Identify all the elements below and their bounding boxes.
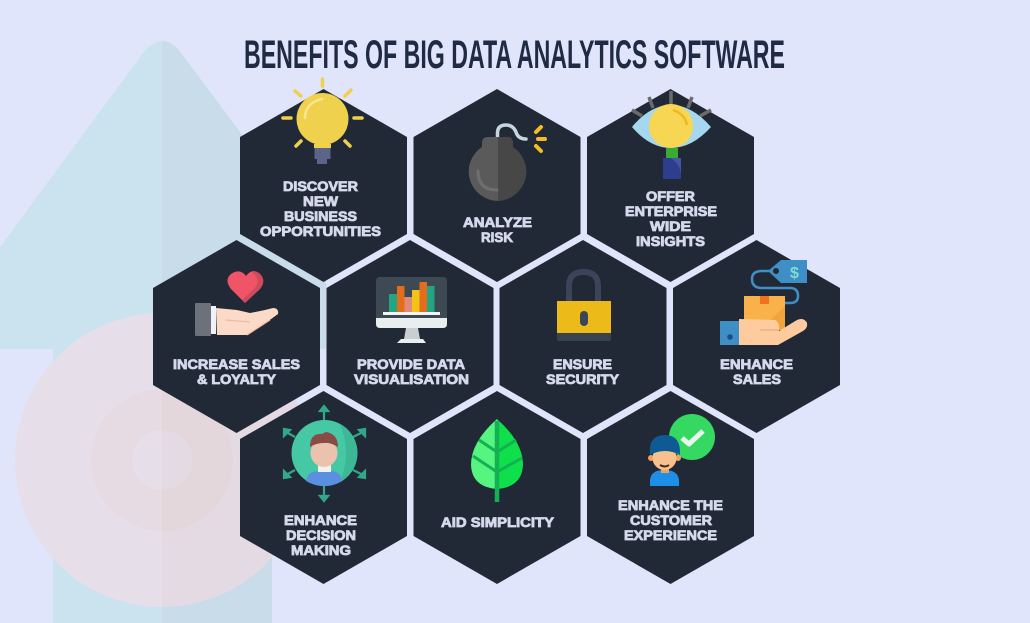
icon: eye with bulb [632, 91, 711, 179]
label [354, 357, 469, 387]
icon: monitor with bar chart [376, 277, 447, 343]
label: WIDE [650, 219, 691, 234]
icon: padlock [557, 272, 611, 341]
label: OPPORTUNITIES [260, 224, 381, 239]
label [173, 357, 300, 387]
panel: aid simplicity [414, 391, 580, 584]
panel: enhance decision making [240, 391, 407, 584]
icon: leaf [471, 419, 523, 502]
label: NEW [303, 194, 338, 209]
label [463, 215, 532, 245]
panel: increase sales and loyalty [153, 240, 320, 433]
label: CUSTOMER [630, 513, 712, 528]
label: EXPERIENCE [624, 528, 717, 543]
icon: hand with parcel and price tag [720, 260, 807, 345]
label [260, 179, 381, 239]
panel: ensure security [500, 240, 666, 433]
label: DECISION [286, 528, 356, 543]
panel: discover new business opportunities [240, 79, 407, 282]
icon: light bulb [283, 79, 362, 164]
label: ENSURE [553, 357, 612, 372]
panel: offer enterprise wide insights [587, 89, 754, 282]
label: PROVIDE DATA [357, 357, 465, 372]
label: ENHANCE [720, 357, 793, 372]
panel: provide data visualisation [326, 240, 494, 433]
icon: person with arrows [284, 406, 365, 501]
label [546, 357, 619, 387]
panel: analyze risk [414, 89, 580, 282]
label: ENHANCE THE [618, 498, 723, 513]
panel: enhance sales [673, 240, 840, 433]
icon: customer with check mark [648, 414, 715, 486]
panel: enhance the customer experience [587, 391, 754, 584]
icon: hand holding heart [195, 271, 278, 336]
label: AID SIMPLICITY [441, 515, 554, 530]
label: ANALYZE [463, 215, 532, 230]
label: SALES [733, 372, 781, 387]
icon: bomb [469, 125, 545, 201]
label: & LOYALTY [197, 372, 276, 387]
label: SECURITY [546, 372, 619, 387]
label [720, 357, 793, 387]
icon: hand with parcel and price tag: $ [790, 265, 799, 282]
label: OFFER [646, 189, 695, 204]
background arrow and target [0, 41, 326, 623]
label: RISK [481, 230, 513, 245]
label: ENHANCE [284, 513, 357, 528]
label: MAKING [291, 543, 351, 558]
label [625, 189, 717, 249]
label: INCREASE SALES [173, 357, 300, 372]
label: BUSINESS [284, 209, 357, 224]
label [284, 513, 357, 558]
label: ENTERPRISE [625, 204, 717, 219]
label: DISCOVER [283, 179, 358, 194]
label [618, 498, 723, 543]
label: VISUALISATION [354, 372, 469, 387]
label: INSIGHTS [636, 234, 705, 249]
